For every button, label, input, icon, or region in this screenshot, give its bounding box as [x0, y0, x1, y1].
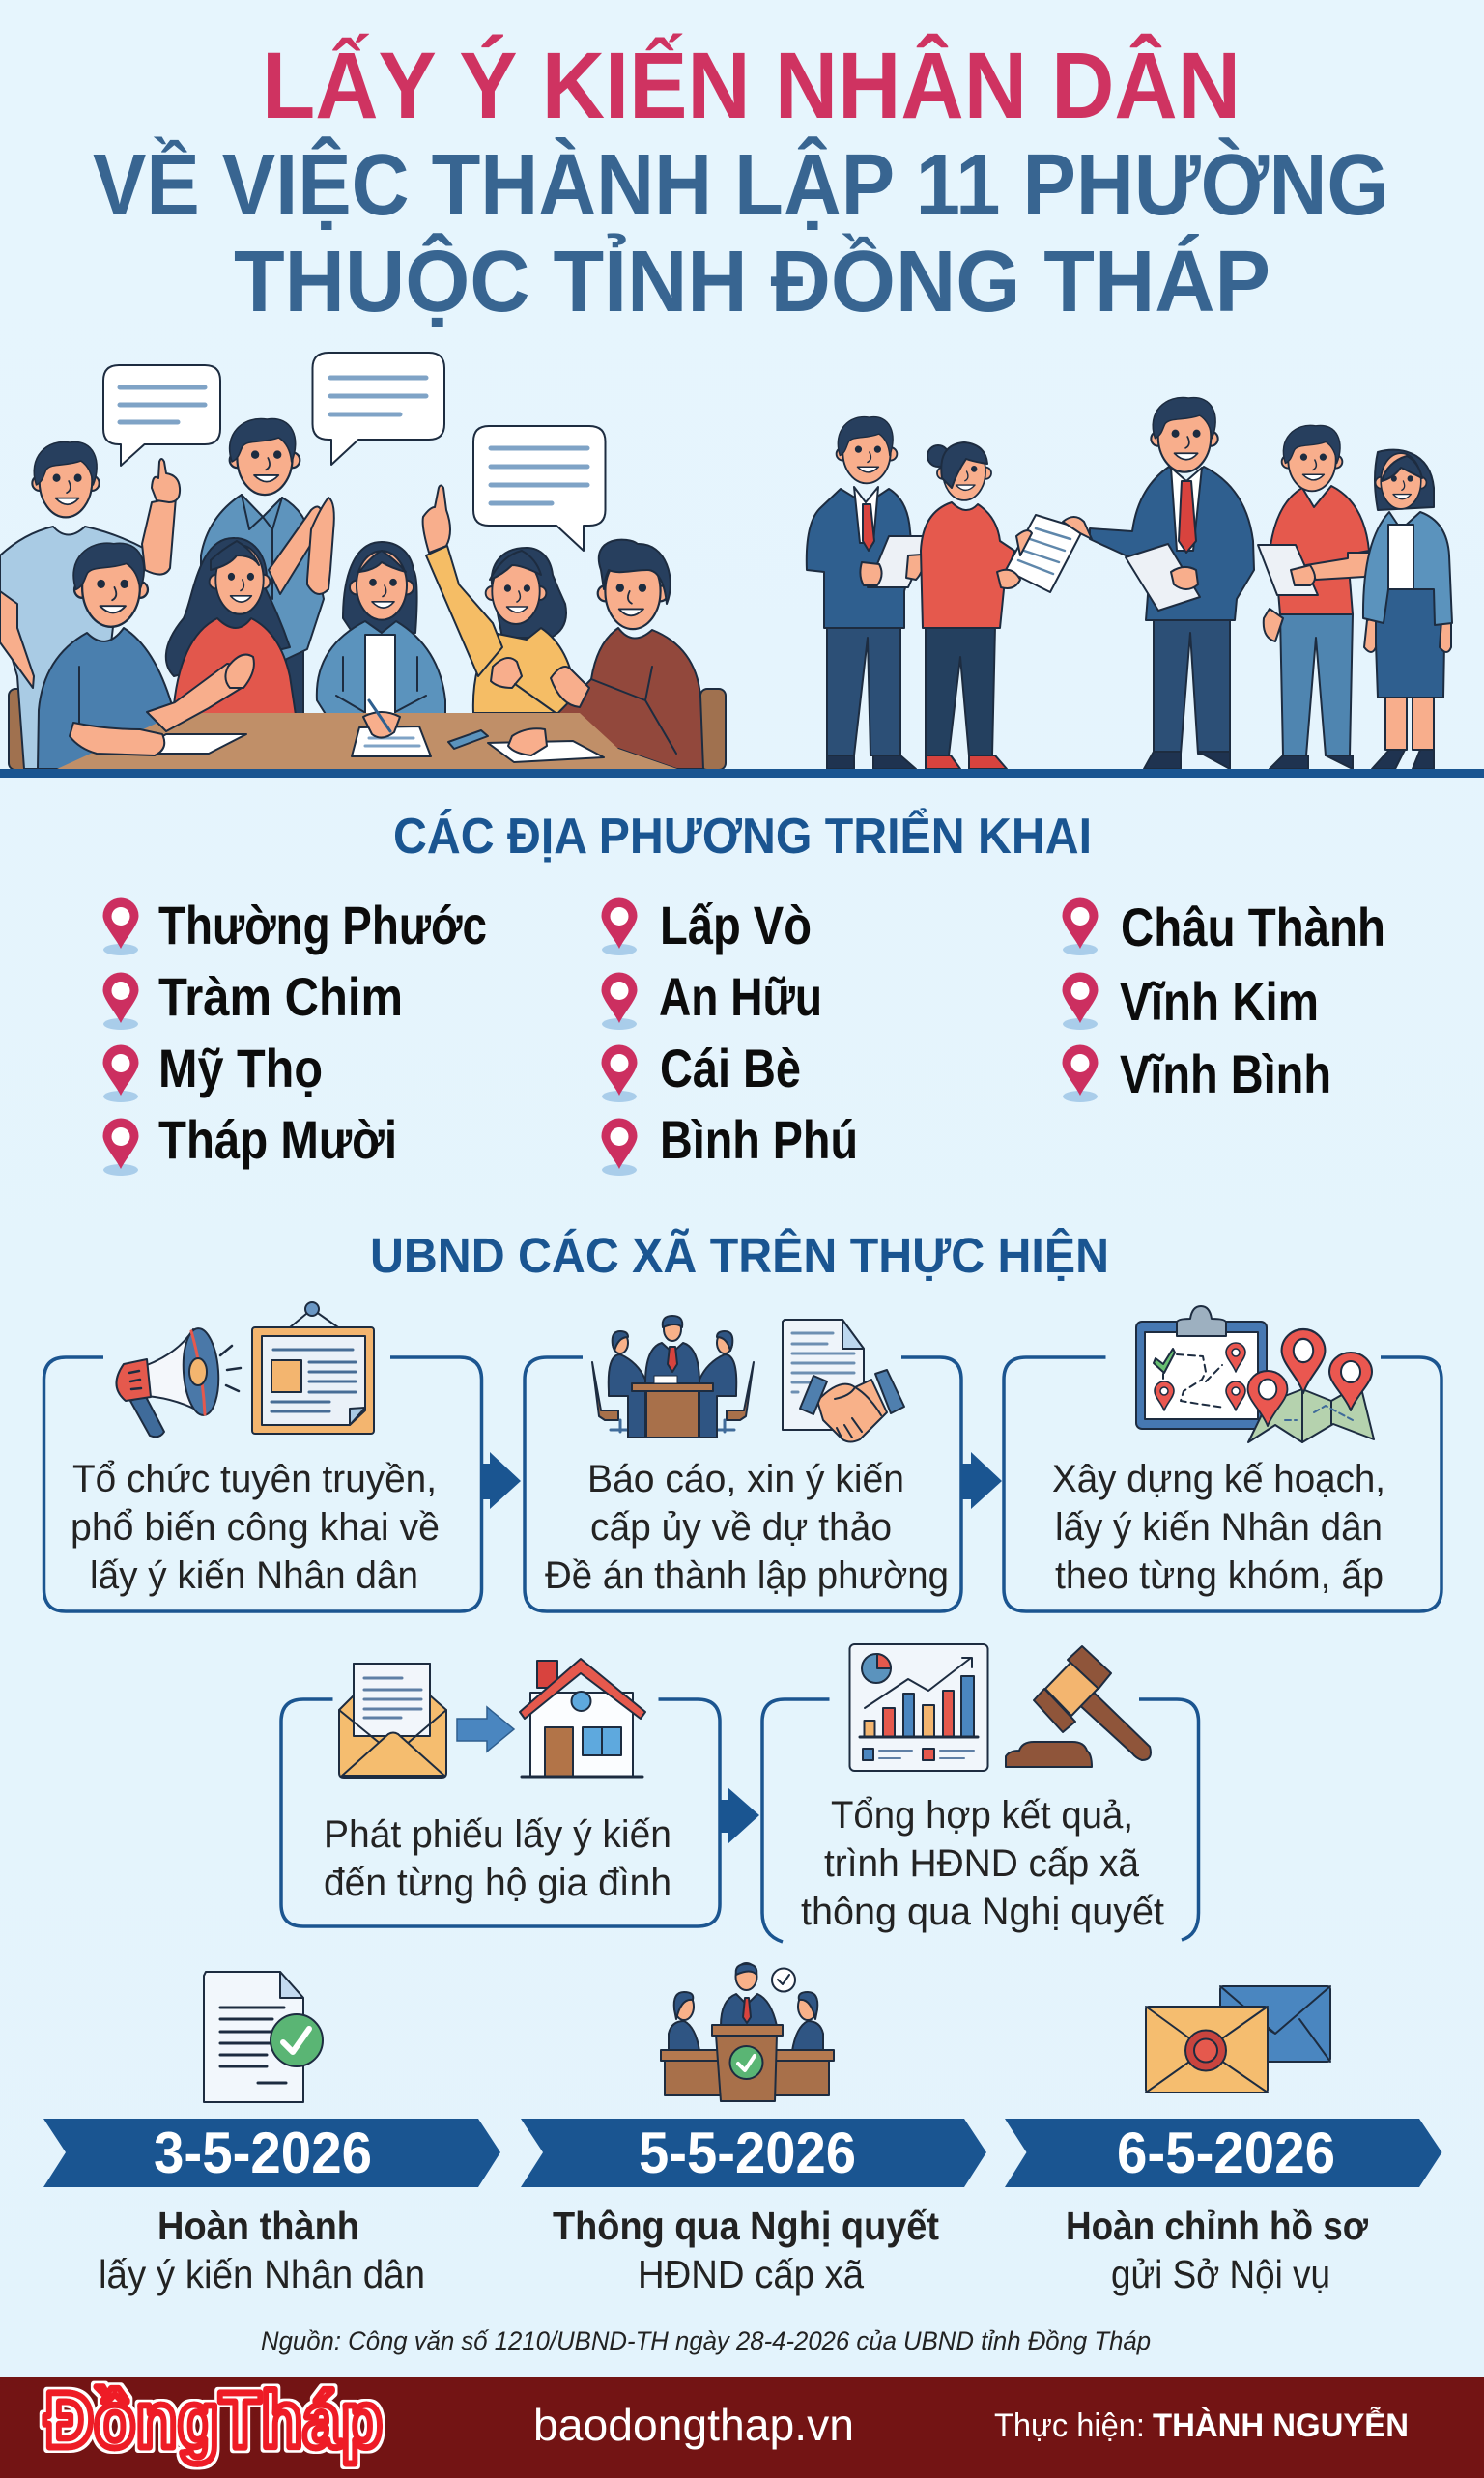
date: 6-5-2026: [1117, 2121, 1335, 2185]
illustration: officials exchanging documents: [807, 397, 1452, 769]
date ribbon: [43, 2119, 500, 2187]
title: [93, 33, 1389, 330]
illustration: citizens discussing around a table: [0, 353, 726, 770]
icon: gavel: [1006, 1646, 1151, 1767]
timeline: 3-5-2026: [43, 1972, 500, 2296]
icon: clipboard plan and map: [1136, 1306, 1374, 1442]
website: baodongthap.vn: [533, 2400, 854, 2450]
arrow: step 1 to 2: [481, 1452, 521, 1509]
person: man in blue t-shirt: [38, 543, 172, 769]
date ribbon: [521, 2119, 986, 2187]
icon: arrow to house: [457, 1707, 514, 1752]
text block: Phát phiếu lấy ý kiến: [324, 1813, 671, 1856]
location: Lấp Vò: Lấp Vò: [660, 895, 812, 955]
description: Hoàn chỉnh hồ sơ: [1066, 2204, 1369, 2248]
text block: Tổ chức tuyên truyền,: [72, 1458, 437, 1500]
arrow: step 4 to 5: [720, 1787, 759, 1844]
text block: trình HĐND cấp xã: [824, 1842, 1140, 1885]
text block: [324, 1813, 671, 1904]
credit: THÀNH NGUYỄN: [1153, 2407, 1409, 2444]
person: man in blue shirt clapping: [201, 418, 334, 715]
date: 3-5-2026: [154, 2121, 372, 2185]
logo: ĐồngTháp: [44, 2377, 383, 2464]
person: woman in red: [166, 538, 296, 715]
location: Tràm Chim: [102, 966, 403, 1030]
timeline: 6-5-2026: [1005, 1986, 1441, 2296]
icon: meeting: [592, 1316, 754, 1438]
location: Lấp Vò: [601, 895, 812, 955]
panel: step 3 plan: [1004, 1306, 1441, 1611]
description: [1066, 2204, 1369, 2296]
person: man in light blue shirt pointing up: [0, 441, 180, 769]
location: Vĩnh Bình: Vĩnh Bình: [1120, 1043, 1331, 1104]
man in suit holding paper: [807, 417, 930, 769]
description: gửi Sở Nội vụ: [1111, 2252, 1330, 2296]
title: VỀ VIỆC THÀNH LẬP 11 PHƯỜNG: [93, 135, 1389, 234]
icon: house: [520, 1659, 645, 1777]
person: man in maroon sweater: [545, 540, 703, 769]
location: Vĩnh Kim: Vĩnh Kim: [1120, 971, 1319, 1032]
icon: report chart: [850, 1644, 987, 1771]
text block: theo từng khóm, ấp: [1055, 1554, 1384, 1597]
icon: sealed envelopes: [1146, 1986, 1330, 2093]
description: Thông qua Nghị quyết: [553, 2204, 939, 2248]
chairs: [9, 689, 726, 770]
location: Tháp Mười: Tháp Mười: [158, 1109, 397, 1170]
location: Vĩnh Kim: [1063, 971, 1319, 1032]
panel: step 1 propaganda: [44, 1302, 481, 1611]
text block: [1052, 1458, 1385, 1597]
woman in red holding paper: [921, 442, 1083, 769]
icon: council podium: [661, 1963, 834, 2101]
arrow: step 2 to 3: [962, 1452, 1002, 1509]
date: 5-5-2026: [639, 2121, 856, 2185]
panel: step 5 summarise results: [762, 1644, 1198, 1942]
text block: đến từng hộ gia đình: [324, 1862, 671, 1904]
person: woman in blue jacket: [317, 542, 445, 726]
woman in blue jacket: [1363, 450, 1452, 769]
location: Châu Thành: Châu Thành: [1121, 897, 1385, 957]
location: An Hữu: An Hữu: [659, 966, 822, 1027]
speech bubble middle: [313, 353, 444, 465]
heading: commune committees carry out: UBND CÁC XÃ TRÊN THỰC HIỆN: [370, 1227, 1109, 1283]
source note: Nguồn: Công văn số 1210/UBND-TH ngày 28-4-2026 của UBND tỉnh Đồng Tháp: [261, 2326, 1151, 2355]
location: Bình Phú: Bình Phú: [660, 1109, 858, 1170]
text block: phổ biến công khai về: [71, 1506, 440, 1549]
text block: [545, 1458, 949, 1597]
title: THUỘC TỈNH ĐỒNG THÁP: [234, 232, 1270, 330]
location: Bình Phú: [601, 1109, 858, 1176]
text block: Tổng hợp kết quả,: [831, 1794, 1133, 1837]
location: Mỹ Thọ: [102, 1038, 323, 1102]
text block: Đề án thành lập phường: [545, 1554, 949, 1597]
location: Tháp Mười: [102, 1109, 397, 1176]
meeting table: [57, 713, 677, 769]
icon: approved document: [204, 1972, 323, 2102]
timeline: 5-5-2026: [521, 1963, 986, 2296]
man in red polo holding paper: [1258, 425, 1371, 769]
arms and hands over table: [70, 655, 589, 755]
text block: thông qua Nghị quyết: [801, 1891, 1164, 1933]
text block: cấp ủy về dự thảo: [590, 1506, 892, 1549]
panel: step 2 report: [525, 1316, 961, 1611]
icon: envelope with letter: [339, 1664, 446, 1778]
location: Cái Bè: [601, 1038, 801, 1102]
description: Hoàn thành: [157, 2204, 359, 2248]
text block: [801, 1794, 1164, 1933]
icon: document and handshake: [783, 1320, 904, 1441]
location: Thường Phước: Thường Phước: [158, 895, 487, 955]
footer band: [0, 2377, 1484, 2478]
central official handing document: [1063, 397, 1254, 769]
locations list: [102, 895, 1385, 1176]
text block: Xây dựng kế hoạch,: [1052, 1458, 1385, 1500]
icon: megaphone: [116, 1327, 241, 1437]
icon: notice board: [252, 1302, 374, 1434]
title: LẤY Ý KIẾN NHÂN DÂN: [262, 33, 1241, 138]
description: [553, 2204, 939, 2296]
description: [99, 2204, 425, 2296]
text block: lấy ý kiến Nhân dân: [1055, 1506, 1383, 1549]
ground bar: [0, 769, 1484, 778]
location: Cái Bè: Cái Bè: [660, 1038, 801, 1098]
date ribbon: [1005, 2119, 1441, 2187]
speech bubble left: [103, 365, 220, 466]
person: woman in yellow raising hand: [423, 485, 576, 715]
location: An Hữu: [601, 966, 822, 1030]
description: lấy ý kiến Nhân dân: [99, 2252, 425, 2296]
text block: lấy ý kiến Nhân dân: [90, 1554, 418, 1597]
papers on table: [132, 726, 604, 762]
location: Tràm Chim: Tràm Chim: [158, 966, 403, 1027]
location: Vĩnh Bình: [1063, 1043, 1331, 1104]
text block: [71, 1458, 440, 1597]
panel: step 4 distribute ballots: [281, 1659, 720, 1926]
text block: Báo cáo, xin ý kiến: [587, 1458, 904, 1500]
heading: implementing localities: CÁC ĐỊA PHƯƠNG TRIỂN KHAI: [393, 808, 1092, 865]
location: Mỹ Thọ: Mỹ Thọ: [158, 1038, 323, 1098]
speech bubble right: [473, 426, 605, 551]
credit: Thực hiện:: [994, 2407, 1145, 2444]
credit: [994, 2407, 1409, 2444]
description: HĐND cấp xã: [638, 2252, 864, 2296]
